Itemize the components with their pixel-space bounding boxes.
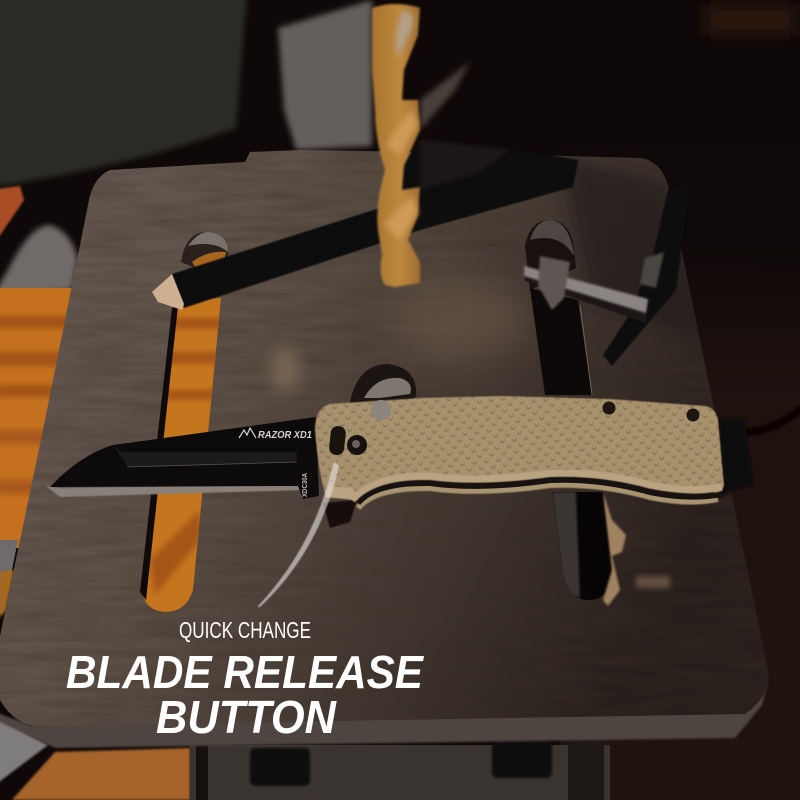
- pivot washer: [350, 364, 416, 420]
- handle screw 1: [602, 402, 616, 414]
- heading line 2: BUTTON: [156, 691, 337, 743]
- drill bit: [372, 4, 420, 287]
- blade: XDC30A: [302, 473, 309, 497]
- subheading: QUICK CHANGE: [179, 617, 311, 643]
- knife: [46, 364, 753, 528]
- left slot with wood visible: [140, 232, 230, 612]
- release button: [328, 425, 346, 456]
- blade: [50, 417, 319, 499]
- drill chuck key: [524, 183, 690, 366]
- drill press column: [278, 0, 470, 150]
- panel: metal table front edge: [0, 680, 768, 748]
- heading line 1: BLADE RELEASE: [66, 646, 424, 698]
- panel: metal table top: [0, 150, 775, 730]
- button screw: [347, 435, 367, 455]
- right slot: [525, 220, 670, 606]
- wood background left: [0, 288, 190, 800]
- blade edge: [46, 484, 305, 497]
- drill press base below table: [190, 738, 610, 800]
- lock lever: [323, 500, 357, 528]
- pivot screw: [371, 400, 391, 420]
- heading: [66, 646, 424, 743]
- handle rim: [352, 473, 722, 500]
- handle end clip: [718, 418, 753, 498]
- blade logo: RAZOR XD1: [258, 430, 312, 441]
- pointer line to button: [257, 461, 339, 607]
- black pencil: [152, 140, 578, 310]
- handle screw 2: [686, 408, 700, 422]
- black liner: [358, 480, 722, 503]
- lower scale: [358, 485, 718, 508]
- handle: [315, 396, 724, 500]
